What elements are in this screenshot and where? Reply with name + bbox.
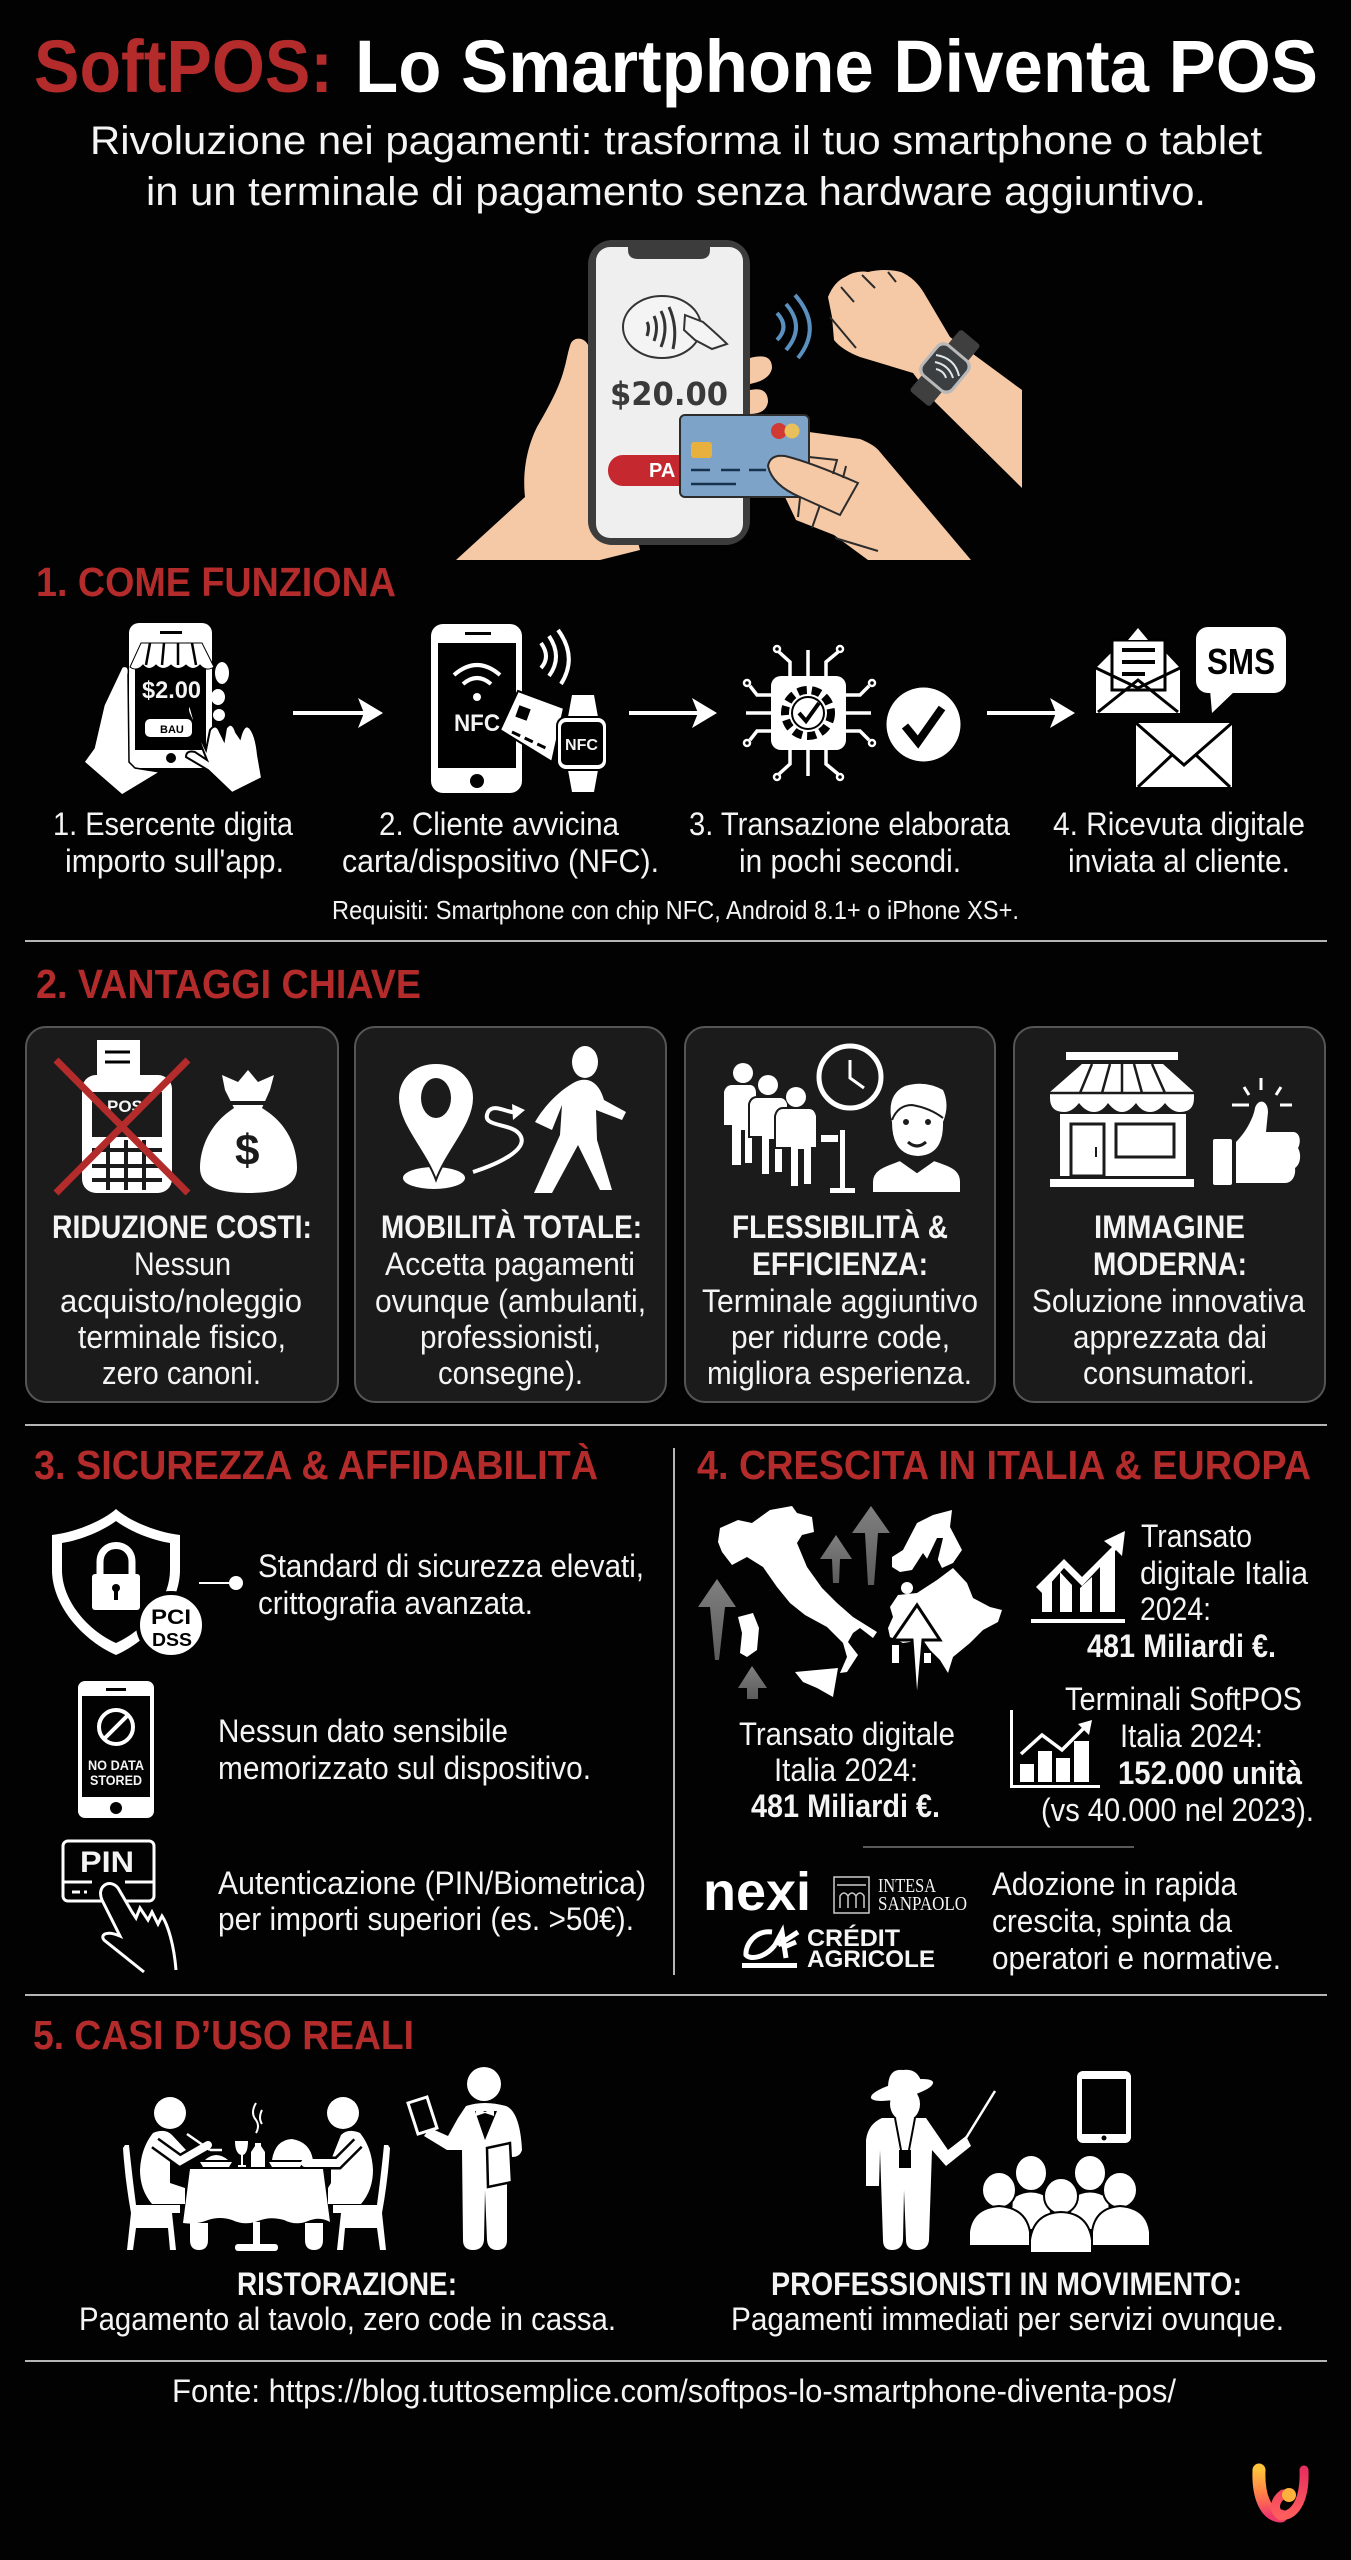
text: immagine moderna: Soluzione innovativa xyxy=(1032,1283,1305,1319)
stat: terminali SoftPOS xyxy=(1041,1681,1314,1828)
icon: audience xyxy=(969,2155,1150,2253)
stat: transato digitale, right: 481 Miliardi €. xyxy=(1087,1628,1276,1664)
heading: crescita: 4. CRESCITA IN ITALIA & EUROPA xyxy=(697,1442,1311,1488)
text: ristorazione: RISTORAZIONE: xyxy=(237,2266,457,2302)
text: immagine moderna: IMMAGINE xyxy=(1094,1209,1245,1245)
hero illustration: phone, card and smartwatch: $20.00 xyxy=(610,375,728,413)
text: riduzione costi: zero canoni. xyxy=(102,1355,261,1391)
text: autenticazione: per importi superiori (es. >50€). xyxy=(218,1901,634,1937)
stat: transato digitale, right xyxy=(1087,1518,1308,1664)
text: ristorazione: Pagamento al tavolo, zero code in cassa. xyxy=(79,2301,616,2337)
icon: email and SMS receipt xyxy=(1096,627,1286,787)
text: flessibilità ed efficienza: FLESSIBILITÀ & xyxy=(732,1209,948,1245)
subtitle xyxy=(90,119,1262,214)
icon: hand entering amount on phone: $2.00 xyxy=(142,677,201,704)
logo: brand mark xyxy=(1259,2470,1304,2516)
logo: Intesa Sanpaolo: INTESA xyxy=(878,1875,936,1897)
logo: Intesa Sanpaolo xyxy=(834,1875,967,1915)
arrow xyxy=(293,698,383,728)
icon: NFC phone, card and watch xyxy=(431,624,607,793)
hero illustration: phone, card and smartwatch xyxy=(456,240,1022,560)
text: autenticazione: Autenticazione (PIN/Biometrica) xyxy=(218,1865,646,1901)
icon: shield with lock and PCI DSS badge: PCI xyxy=(151,1606,191,1629)
step captions: inviata al cliente. xyxy=(1068,843,1290,879)
step captions: 1. Esercente digita xyxy=(53,806,293,842)
icon: shield with lock and PCI DSS badge xyxy=(52,1509,243,1657)
text: immagine moderna xyxy=(1032,1209,1305,1391)
stat: transato digitale, left: Italia 2024: xyxy=(774,1752,918,1788)
panel: immagine moderna xyxy=(1014,1027,1325,1402)
icon: crossed POS and money bag xyxy=(56,1040,297,1193)
panel: flessibilità ed efficienza xyxy=(685,1027,995,1402)
icon: PIN pad with finger: PIN xyxy=(80,1846,134,1879)
text: professionisti in movimento: PROFESSIONISTI IN MOVIMENTO: xyxy=(771,2266,1242,2302)
text: riduzione costi: RIDUZIONE COSTI: xyxy=(52,1209,312,1245)
text: riduzione costi: Nessun xyxy=(134,1246,231,1282)
stat: terminali SoftPOS: (vs 40.000 nel 2023). xyxy=(1041,1792,1314,1828)
step captions: 3. Transazione elaborata xyxy=(689,806,1010,842)
icon: NFC phone, card and watch: NFC xyxy=(565,737,598,754)
text: nessun dato sensibile: Nessun dato sensibile xyxy=(218,1713,508,1749)
text: adozione: crescita, spinta da xyxy=(992,1903,1232,1939)
icon: phone no data stored: STORED xyxy=(90,1772,142,1788)
icon: crossed POS and money bag: $ xyxy=(235,1126,259,1175)
hero illustration: phone, card and smartwatch: PA xyxy=(649,460,675,482)
text: flessibilità ed efficienza: migliora esperienza. xyxy=(707,1355,972,1391)
text: adozione xyxy=(992,1866,1281,1976)
title: Lo Smartphone Diventa POS xyxy=(355,25,1318,108)
text: standard di sicurezza: crittografia avanzata. xyxy=(258,1585,533,1621)
arrow xyxy=(629,698,717,728)
text: nessun dato sensibile xyxy=(218,1713,591,1786)
text: mobilità totale: ovunque (ambulanti, xyxy=(375,1283,646,1319)
icon: gray growth arrows xyxy=(698,1506,890,1699)
stat: transato digitale, left: 481 Miliardi €. xyxy=(751,1788,940,1824)
icon: presenter with pointer xyxy=(866,2070,995,2250)
icon: restaurant table with diners xyxy=(123,2097,390,2251)
section 3: sicurezza e affidabilità xyxy=(34,1442,646,1972)
text: professionisti in movimento xyxy=(731,2266,1284,2337)
icon: PIN pad with finger xyxy=(63,1841,176,1972)
icon: email and SMS receipt: SMS xyxy=(1207,641,1275,682)
logo: nexi: nexi xyxy=(703,1862,811,1922)
step captions: carta/dispositivo (NFC). xyxy=(342,843,659,879)
source line: Fonte: https://blog.tuttosemplice.com/softpos-lo-smartphone-diventa-pos/ xyxy=(172,2373,1176,2409)
text: riduzione costi xyxy=(52,1209,312,1391)
step captions: 4. Ricevuta digitale xyxy=(1053,806,1305,842)
logo: Crédit Agricole xyxy=(742,1924,935,1973)
stat: transato digitale, right: 2024: xyxy=(1140,1591,1211,1627)
icon: queue, clock and cashier xyxy=(724,1046,961,1193)
stat: transato digitale, right: Transato xyxy=(1141,1518,1252,1554)
icon: NFC phone, card and watch: NFC xyxy=(454,710,500,737)
icon: map of Italy xyxy=(718,1506,877,1697)
heading: come funziona: 1. COME FUNZIONA xyxy=(36,559,396,605)
requirements note: Requisiti: Smartphone con chip NFC, Android 8.1+ o iPhone XS+. xyxy=(332,895,1019,925)
text: standard di sicurezza xyxy=(258,1548,644,1621)
icon: terminals chart xyxy=(1010,1710,1100,1788)
text: flessibilità ed efficienza: Terminale aggiuntivo xyxy=(702,1283,978,1319)
logo: Crédit Agricole: AGRICOLE xyxy=(807,1946,935,1973)
icon: hand entering amount on phone xyxy=(84,623,262,795)
text: flessibilità ed efficienza: per ridurre code, xyxy=(731,1319,950,1355)
step captions xyxy=(53,806,1305,879)
text: mobilità totale: consegne). xyxy=(438,1355,583,1391)
step captions: importo sull'app. xyxy=(65,843,284,879)
subtitle: in un terminale di pagamento senza hardware aggiuntivo. xyxy=(146,170,1206,214)
text: mobilità totale: Accetta pagamenti xyxy=(385,1246,635,1282)
icon: rising bar chart xyxy=(1031,1531,1125,1623)
logo: Intesa Sanpaolo: SANPAOLO xyxy=(878,1893,967,1915)
icon: map of Europe with white arrow xyxy=(888,1510,1002,1697)
text: professionisti in movimento: Pagamenti immediati per servizi ovunque. xyxy=(731,2301,1284,2337)
icon: shield with lock and PCI DSS badge: DSS xyxy=(152,1630,192,1650)
heading: casi d'uso: 5. CASI D’USO REALI xyxy=(33,2012,414,2058)
heading: sicurezza: 3. SICUREZZA & AFFIDABILITÀ xyxy=(34,1442,598,1488)
icon: waiter with tablet xyxy=(408,2067,522,2250)
icon: phone no data stored: NO DATA xyxy=(88,1757,144,1773)
icon: modern shop and thumbs up xyxy=(1050,1052,1300,1187)
section 4: crescita in Italia ed Europa xyxy=(697,1442,1314,1976)
text: immagine moderna: MODERNA: xyxy=(1093,1246,1247,1282)
title: SoftPOS: xyxy=(34,25,333,108)
step captions: in pochi secondi. xyxy=(739,843,961,879)
stat: transato digitale, right: digitale Italia xyxy=(1140,1555,1308,1591)
text: riduzione costi: terminale fisico, xyxy=(78,1319,286,1355)
icon: chip with gear and check xyxy=(744,646,960,780)
text: ristorazione xyxy=(79,2266,616,2337)
panel: mobilità totale xyxy=(355,1027,666,1402)
step captions: 2. Cliente avvicina xyxy=(379,806,619,842)
text: standard di sicurezza: Standard di sicurezza elevati, xyxy=(258,1548,644,1584)
icon: hand entering amount on phone: BAU xyxy=(160,724,184,736)
text: mobilità totale: professionisti, xyxy=(420,1319,601,1355)
icon: phone no data stored xyxy=(78,1681,154,1818)
text: autenticazione xyxy=(218,1865,646,1937)
stat: terminali SoftPOS: 152.000 unità xyxy=(1118,1755,1302,1791)
section 5: casi d'uso reali xyxy=(33,2012,1284,2337)
text: flessibilità ed efficienza: EFFICIENZA: xyxy=(752,1246,928,1282)
text: adozione: operatori e normative. xyxy=(992,1940,1281,1976)
text: immagine moderna: apprezzata dai xyxy=(1073,1319,1267,1355)
text: riduzione costi: acquisto/noleggio xyxy=(60,1283,302,1319)
section 2: vantaggi chiave xyxy=(26,961,1325,1402)
stat: transato digitale, left xyxy=(739,1716,955,1824)
arrow xyxy=(987,698,1075,728)
stat: transato digitale, left: Transato digitale xyxy=(739,1716,955,1752)
logo: Crédit Agricole: CRÉDIT xyxy=(807,1924,900,1952)
icon: crossed POS and money bag: POS xyxy=(107,1097,143,1116)
text: flessibilità ed efficienza xyxy=(702,1209,978,1391)
panel: riduzione costi xyxy=(26,1027,338,1402)
subtitle: Rivoluzione nei pagamenti: trasforma il tuo smartphone o tablet xyxy=(90,119,1262,163)
icon: tablet xyxy=(1077,2071,1131,2143)
icon: map pin and walking person xyxy=(398,1046,626,1193)
text: mobilità totale: MOBILITÀ TOTALE: xyxy=(381,1209,642,1245)
stat: terminali SoftPOS: Terminali SoftPOS xyxy=(1065,1681,1302,1717)
text: mobilità totale xyxy=(375,1209,646,1391)
heading: vantaggi chiave: 2. VANTAGGI CHIAVE xyxy=(36,961,421,1007)
text: immagine moderna: consumatori. xyxy=(1083,1355,1255,1391)
text: adozione: Adozione in rapida xyxy=(992,1866,1237,1902)
section 1: come funziona xyxy=(36,559,1305,925)
stat: terminali SoftPOS: Italia 2024: xyxy=(1120,1718,1263,1754)
text: nessun dato sensibile: memorizzato sul dispositivo. xyxy=(218,1750,591,1786)
